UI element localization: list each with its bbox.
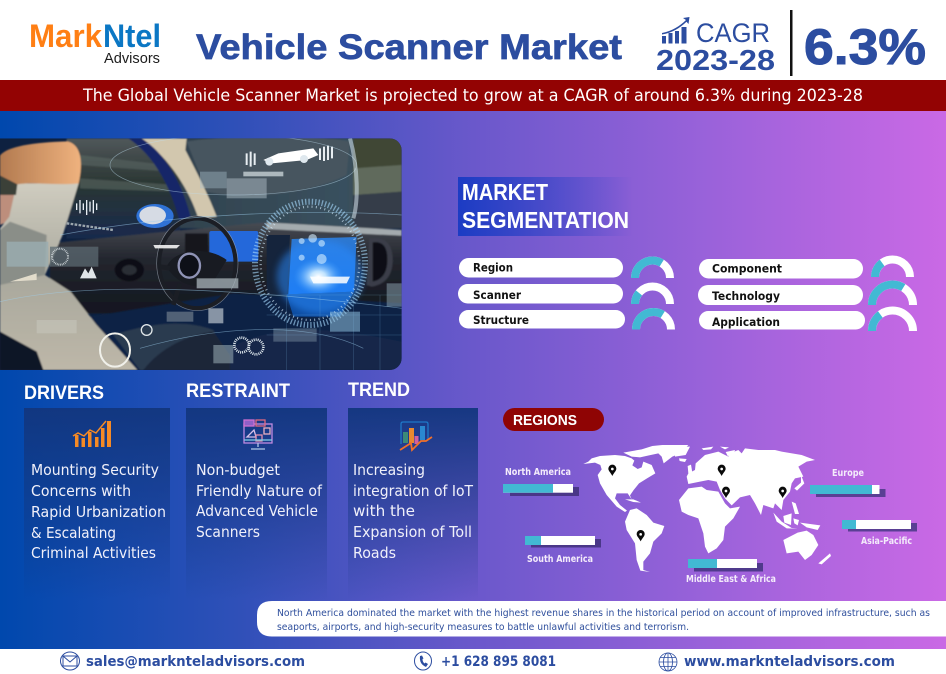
website: www.marknteladvisors.com <box>684 654 895 670</box>
icon: globe <box>659 653 677 671</box>
heading: drivers: DRIVERS <box>24 382 104 404</box>
panel: drivers <box>24 382 170 600</box>
heading: market segmentation: MARKET <box>462 179 548 205</box>
email address: sales@marknteladvisors.com <box>86 654 305 670</box>
heading: regions: REGIONS <box>513 413 577 429</box>
cagr value: 6.3% <box>804 19 926 75</box>
text: trend: with the <box>353 502 415 520</box>
region: north america: North America <box>505 467 571 478</box>
region: asia-pacific <box>842 520 917 547</box>
region: asia-pacific: Asia-Pacific <box>861 536 912 547</box>
text: trend: Expansion of Toll <box>353 523 472 541</box>
text: trend: integration of IoT <box>353 482 474 500</box>
text: restraint <box>196 461 323 541</box>
icon: growth chart <box>662 17 690 44</box>
segment: application <box>699 310 913 331</box>
region: middle east and africa: Middle East & Africa <box>686 574 776 585</box>
region: south america: South America <box>527 554 593 565</box>
segment: region: Region <box>473 260 513 274</box>
map pins <box>608 465 787 541</box>
gradient background <box>0 111 946 649</box>
panel: regions <box>503 408 917 585</box>
panel: market segmentation <box>458 177 913 331</box>
text: drivers <box>31 461 166 562</box>
segment: region <box>459 258 670 278</box>
text: drivers: Rapid Urbanization <box>31 503 166 521</box>
text: trend: Roads <box>353 544 396 562</box>
logo <box>29 18 161 67</box>
wing mirror <box>136 204 174 228</box>
divider <box>790 10 792 76</box>
segment: scanner: Scanner <box>473 288 521 302</box>
segment: application: Application <box>712 315 780 329</box>
text: restraint: Scanners <box>196 523 260 541</box>
text: drivers: Concerns with <box>31 482 131 500</box>
icon: email <box>60 652 80 670</box>
panel: trend <box>348 379 478 600</box>
heading: market segmentation <box>458 177 633 236</box>
title: Vehicle Scanner Market <box>196 27 622 67</box>
banner <box>0 80 946 111</box>
heading: restraint: RESTRAINT <box>186 380 290 402</box>
holographic glow <box>255 202 365 325</box>
screens <box>209 231 357 317</box>
text: restraint: Friendly Nature of <box>196 482 323 500</box>
icon: trend chart <box>400 422 432 450</box>
region: south america <box>525 536 601 565</box>
logo: Advisors <box>104 50 160 67</box>
text: restraint: Advanced Vehicle <box>196 502 318 520</box>
panel: restraint <box>186 380 327 600</box>
logo: Ntel <box>103 18 161 54</box>
footer <box>0 649 946 674</box>
segment: structure: Structure <box>473 313 529 327</box>
region: middle east and africa <box>686 559 776 585</box>
text: drivers: & Escalating <box>31 524 116 542</box>
heading: trend: TREND <box>348 379 410 401</box>
text: restraint: Non-budget <box>196 461 280 479</box>
heading: regions <box>503 408 604 431</box>
cagr label: CAGR <box>696 18 770 48</box>
text: trend: Increasing <box>353 461 425 479</box>
segment: component <box>699 259 910 278</box>
heading: market segmentation: SEGMENTATION <box>462 207 629 233</box>
icon: monitor with marketing symbols <box>244 420 272 449</box>
segment: technology <box>698 284 913 305</box>
callout: north america note: seaports, airports, and high-security measures to battle unlawful activities and terrorism. <box>277 622 689 633</box>
header <box>29 10 926 77</box>
icon: phone <box>414 652 432 670</box>
text: trend <box>353 461 474 562</box>
logo: Mark <box>29 18 102 54</box>
region: europe: Europe <box>832 468 864 479</box>
segment: technology: Technology <box>712 289 780 303</box>
phone number: +1 628 895 8081 <box>441 654 556 670</box>
world map <box>583 445 831 572</box>
segment: structure <box>459 310 671 330</box>
steering wheel <box>157 216 238 311</box>
segment: component: Component <box>712 262 782 276</box>
segment: scanner <box>458 284 670 304</box>
region: europe <box>810 468 886 497</box>
hud overlays <box>0 135 402 370</box>
text: drivers: Criminal Activities <box>31 544 156 562</box>
text: drivers: Mounting Security <box>31 461 159 479</box>
cagr period: 2023-28 <box>656 45 775 77</box>
photo: vehicle cockpit with holographic interface <box>0 135 402 370</box>
region: north america <box>503 467 579 496</box>
callout: north america note <box>257 601 946 636</box>
icon: rising bars <box>73 421 111 447</box>
banner: The Global Vehicle Scanner Market is projected to grow at a CAGR of around 6.3% during 2023-28 <box>82 86 863 106</box>
